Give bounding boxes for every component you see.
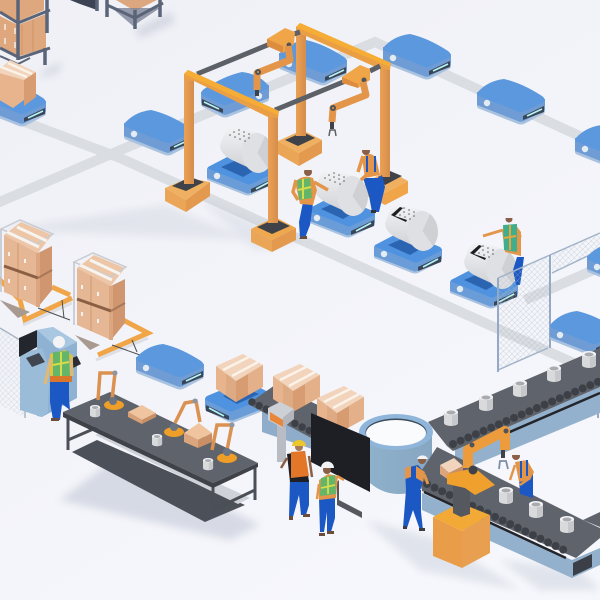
box on conveyor: [440, 458, 463, 480]
conveyor belt: [248, 385, 350, 440]
belt surface: [428, 348, 600, 451]
guide tracks: [0, 42, 600, 375]
AGV under gantry, mirrored: [201, 72, 269, 118]
conveyor back right: [428, 348, 600, 473]
arm lower: [329, 82, 366, 136]
table top: [63, 392, 258, 483]
cups: [444, 351, 596, 426]
gantry post back-right: [380, 65, 390, 177]
assembly table: [63, 370, 258, 522]
worker by drum, green vest: [293, 165, 328, 239]
table legs: [68, 415, 255, 515]
console: [26, 353, 45, 367]
base box: [433, 503, 490, 531]
next belt section: [583, 512, 600, 527]
lift forks 1: [0, 278, 72, 325]
low bench bar: [337, 480, 362, 518]
belt underside line: [505, 393, 600, 434]
box 1: [216, 354, 263, 402]
robot arm 1: [98, 370, 124, 410]
control kiosk with mesh side: [0, 327, 81, 418]
stacked pallet 2: [74, 253, 148, 360]
gantry front frame: [165, 70, 296, 252]
top-left shelving rack: [0, 0, 50, 65]
AGV behind fence right: [550, 311, 600, 356]
top-left AGV carrying box: [0, 60, 46, 126]
black glass screen: [311, 413, 370, 492]
gantry back frame: [278, 23, 408, 205]
belt underside line: [424, 492, 566, 558]
gantry top beam back: [296, 23, 391, 70]
conveyor with boxes: [205, 354, 364, 449]
arm: [468, 431, 505, 468]
worker at kiosk: [45, 336, 73, 421]
table box 2: [184, 423, 212, 448]
gantry post back-left: [296, 30, 306, 136]
carriage lower: [342, 65, 370, 88]
worker at far drum, green vest: [483, 214, 524, 285]
gantry base front-right: [251, 217, 296, 252]
box 2: [273, 364, 320, 412]
gripper: [499, 450, 508, 469]
worker green vest front: [317, 462, 344, 536]
conveyor base: [455, 387, 600, 473]
AGV top right 2: [477, 79, 545, 124]
AGV top right 1: [383, 34, 451, 80]
rollers: [427, 484, 568, 552]
conveyor base: [262, 410, 312, 449]
side pad: [72, 356, 81, 368]
table light strip: [95, 431, 250, 504]
rails and robot arms: [197, 28, 380, 136]
under-table shadow: [72, 440, 245, 522]
yellow robot arm station: [433, 428, 508, 568]
box 3: [317, 386, 364, 434]
rail lower: [275, 66, 380, 110]
top shelving rack: [70, 0, 163, 29]
conveyor base: [422, 493, 572, 578]
AGV and drum 2: [307, 170, 375, 238]
AGV under first box, mirrored: [205, 380, 273, 422]
AGV behind fence far right: [587, 243, 600, 288]
AGV row, back line: [124, 34, 600, 170]
panel on post: [268, 402, 294, 462]
open AGV under gantry with drum: [207, 127, 275, 196]
gantry base back-left: [278, 130, 322, 166]
drum press machine: [359, 414, 433, 494]
belt surface: [420, 447, 600, 558]
mesh side panel: [0, 328, 25, 418]
carriage upper: [267, 28, 295, 53]
AGV and drum 3: [374, 205, 442, 274]
gantry base back-right: [365, 170, 408, 205]
monitor: [19, 330, 37, 357]
AGV top centre: [279, 40, 347, 86]
conveyor front right: [420, 447, 600, 578]
AGV by pallets: [136, 344, 204, 390]
AGV left of gantry: [124, 110, 192, 156]
conveyor rollers: [252, 402, 310, 431]
guarding fence: [498, 233, 600, 418]
platform: [447, 468, 495, 495]
table cups: [90, 405, 213, 470]
worker yellow hat: [281, 440, 312, 520]
table box 1: [128, 405, 156, 424]
cabinet: [37, 327, 77, 417]
worker by drum, blue overalls: [358, 145, 385, 213]
worker blue overalls front: [403, 455, 428, 531]
gantry top beam front: [184, 70, 279, 118]
rollers: [453, 381, 600, 444]
arm upper: [257, 46, 290, 96]
open AGV row with drums: [307, 170, 519, 308]
AGV and drum 4: [450, 243, 519, 308]
gantry post front-right: [268, 115, 278, 223]
AGV top right 3: [575, 125, 600, 170]
robot arm 3: [212, 422, 237, 463]
gantry base front-left: [165, 177, 210, 212]
cups: [499, 487, 574, 533]
rail upper: [197, 44, 270, 74]
worker by conveyor right: [510, 450, 534, 498]
gantry post front-left: [184, 76, 194, 184]
robot arm 2: [164, 398, 200, 437]
lift forks 2: [75, 320, 148, 360]
column: [453, 474, 470, 517]
stacked pallet 1: [0, 220, 72, 325]
